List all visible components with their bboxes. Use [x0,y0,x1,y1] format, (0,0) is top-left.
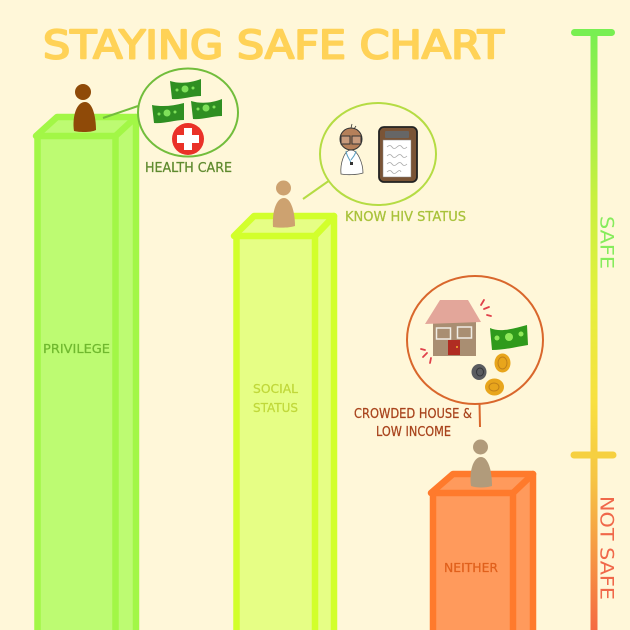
gauge label: not safe: NOT SAFE [596,496,618,600]
callout: know HIV status [303,103,466,225]
icon: clipboard [379,127,417,182]
icon: banknote left [152,103,184,123]
panel: privilege bar [36,117,136,630]
panel: social status bar: STATUS [253,400,298,415]
icon: medical cross [172,123,204,155]
icon: house [421,300,491,363]
panel: neither bar [431,474,533,630]
callout: crowded house and low income [354,276,543,440]
icon: dark brown person [73,84,96,132]
bar label: social status: SOCIAL [253,381,298,396]
bar label: neither: NEITHER [444,560,498,575]
title: STAYING SAFE CHART [43,24,504,68]
icon: banknote top [170,79,201,99]
callout label: health care: HEALTH CARE [145,161,232,176]
callout label: crowded house and low income: CROWDED HOUSE & [354,407,472,422]
icon: banknote [490,325,528,350]
callout label: know HIV status: KNOW HIV STATUS [345,210,466,225]
callout: health care [103,68,238,176]
icon: taupe person [470,440,492,488]
bar label: privilege: PRIVILEGE [43,341,110,356]
safety gauge [570,29,618,630]
panel: social status bar [234,216,334,630]
icon: doctor [340,124,363,175]
icon: banknote right [191,99,222,119]
callout: crowded house and low income: LOW INCOME [376,425,451,440]
gauge label: safe: SAFE [596,216,618,269]
icon: coins [472,354,510,396]
icon: tan person [273,180,295,228]
